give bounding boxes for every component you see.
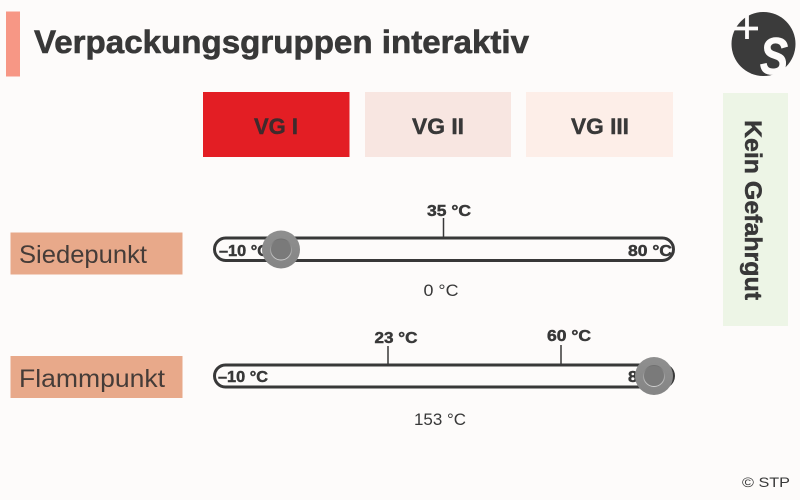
button: VG I	[203, 92, 350, 157]
scale minimum: –10 °C	[218, 369, 268, 386]
tick: 35 °C: 35 °C	[427, 203, 471, 220]
icon: plus sign	[730, 15, 758, 39]
tick: 35 °C	[427, 203, 471, 238]
slider track	[214, 365, 674, 387]
button: VG III	[526, 92, 673, 157]
tick: 23 °C: 23 °C	[374, 330, 418, 347]
current value: 153 °C	[414, 411, 466, 429]
title accent bar	[6, 12, 20, 76]
copyright: © STP	[742, 474, 790, 490]
label: Siedepunkt: Siedepunkt	[19, 241, 147, 269]
current value: 0 °C	[424, 282, 459, 300]
panel: Kein Gefahrgut: Kein Gefahrgut	[739, 120, 766, 300]
label: Siedepunkt	[10, 232, 182, 274]
slider track	[214, 238, 674, 260]
icon: letter S: S	[760, 28, 788, 86]
slider: Siedepunkt	[214, 203, 674, 300]
slider knob	[635, 357, 673, 395]
tick: 23 °C	[374, 330, 418, 365]
title: Verpackungsgruppen interaktiv	[34, 24, 529, 60]
slider: Flammpunkt	[214, 328, 674, 429]
tick: 60 °C: 60 °C	[547, 328, 591, 345]
logo: +S	[730, 12, 796, 86]
panel: Kein Gefahrgut	[723, 93, 788, 326]
label: Flammpunkt: Flammpunkt	[19, 365, 165, 393]
label: Flammpunkt	[10, 356, 182, 398]
slider knob	[262, 230, 300, 268]
button: VG II: VG II	[412, 114, 464, 139]
scale maximum: 80 °C	[628, 369, 672, 386]
button: VG III: VG III	[571, 114, 629, 139]
button: VG II	[365, 92, 511, 157]
scale maximum: 80 °C	[628, 243, 672, 260]
scale minimum: –10 °C	[219, 243, 269, 260]
tick: 60 °C	[547, 328, 591, 365]
button: VG I: VG I	[254, 114, 298, 139]
